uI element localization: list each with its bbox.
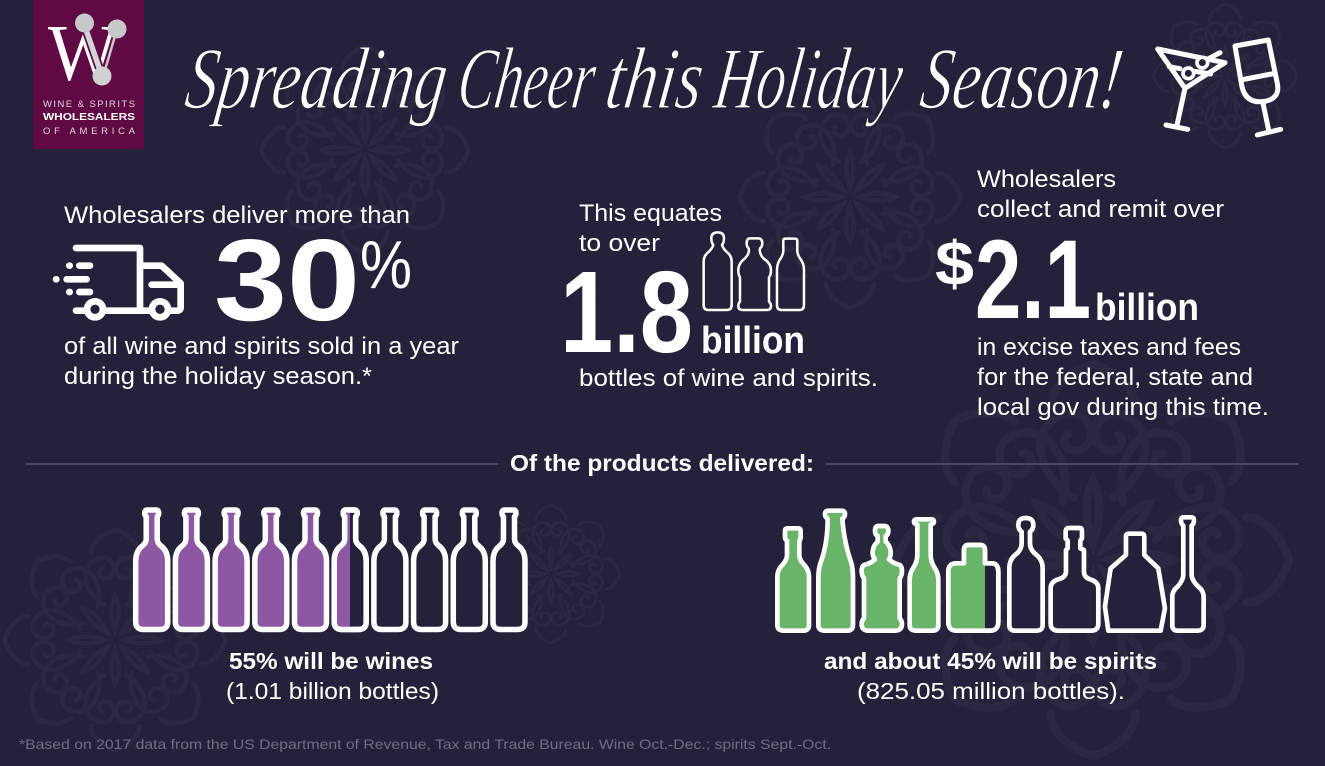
stat: 1.8 billion bottles: to over [579,230,660,257]
stat: 2.1 billion taxes: collect and remit over [977,196,1224,223]
title: Season! [915,30,1129,128]
icon: delivery truck [56,248,181,317]
footnote: *Based on 2017 data from the US Department of Revenue, Tax and Trade Bureau. Wine Oct.-Dec.; spirits Sept.-Oct. [19,736,831,752]
icon: martini and wine glass [1158,40,1281,135]
stat: 2.1 billion taxes: billion [1095,287,1199,329]
stat: 2.1 billion taxes: $ [935,230,974,299]
logo: Wine & Spirits Wholesalers of America: W [48,10,118,98]
stat: 1.8 billion bottles: This equates [579,200,722,227]
section heading: Of the products delivered: [510,450,814,476]
title: this [600,30,710,128]
stat: 2.1 billion taxes: local gov during this time. [977,394,1269,421]
chart: spirit bottles 45 percent [777,511,1204,631]
caption: wines [226,648,439,704]
stat: 1.8 billion bottles: billion [701,320,805,362]
logo: Wine & Spirits Wholesalers of America: WINE & SPIRITS [43,99,135,110]
stat: 2.1 billion taxes: for the federal, state and [977,364,1253,391]
stat: 2.1 billion taxes: 2.1 [975,217,1091,342]
caption: spirits [824,648,1157,704]
stat: 30 percent: of all wine and spirits sold in a year [64,333,459,360]
stat: 30 percent: 30 [214,215,360,345]
stat: 1.8 billion bottles: bottles of wine and spirits. [579,365,878,392]
stat: 30 percent: during the holiday season.* [64,363,372,390]
stat: 30 percent [56,202,459,390]
caption: wines: (1.01 billion bottles) [226,678,439,704]
stat: 30 percent: Wholesalers deliver more than [64,202,410,229]
title: Cheer [452,30,602,128]
caption: spirits: (825.05 million bottles). [857,678,1125,704]
stat: 30 percent: % [360,227,412,303]
logo: Wine & Spirits Wholesalers of America: WHOLESALERS [43,112,135,123]
stat: 2.1 billion taxes: in excise taxes and fees [977,334,1241,361]
stat: 2.1 billion taxes: Wholesalers [977,166,1116,193]
icon: three bottle outlines [704,232,804,310]
title: Holiday [709,30,909,128]
title: Spreading [180,30,454,128]
logo: Wine & Spirits Wholesalers of America [33,0,144,149]
caption: wines: 55% will be wines [229,648,433,674]
stat: 2.1 billion taxes [935,166,1269,421]
stat: 1.8 billion bottles [560,200,878,392]
chart: wine bottles 55 percent [136,510,525,630]
logo: Wine & Spirits Wholesalers of America: OF AMERICA [43,126,136,137]
caption: spirits: and about 45% will be spirits [824,648,1157,674]
stat: 1.8 billion bottles: 1.8 [560,247,693,377]
